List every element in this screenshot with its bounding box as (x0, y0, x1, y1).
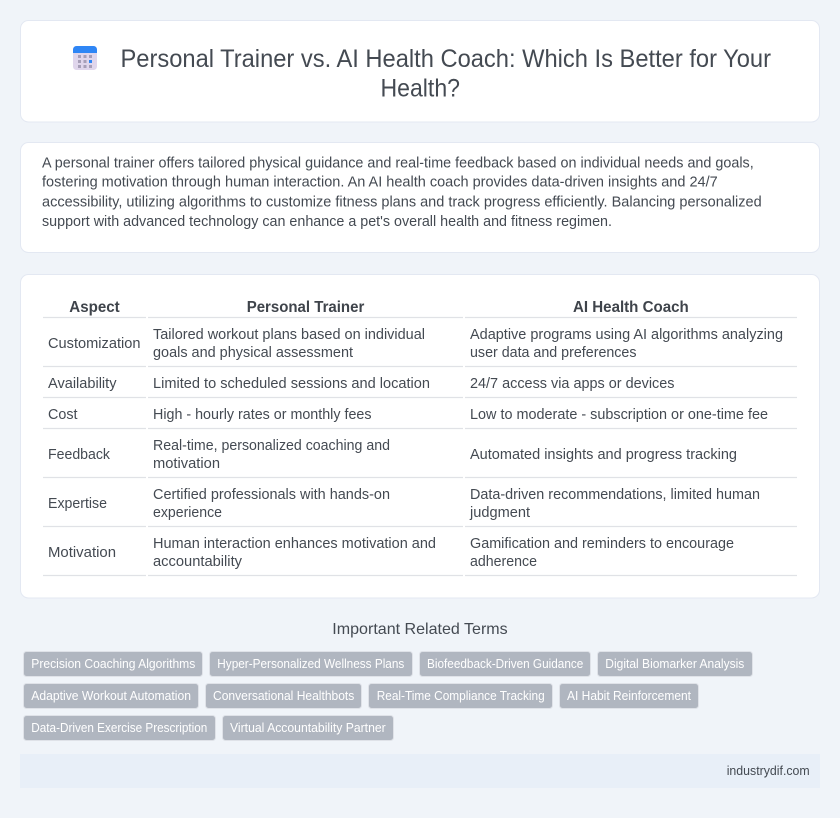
row: cost: Cost (48, 407, 78, 423)
row: availability: Availability (48, 376, 117, 392)
table header: Aspect (69, 299, 120, 316)
row: expertise (48, 487, 760, 521)
row: cost: High - hourly rates or monthly fees (153, 407, 372, 423)
row: motivation: Motivation (48, 545, 116, 561)
heading: important related terms: Important Related Terms (332, 621, 508, 638)
intro text: A personal trainer offers tailored physical guidance and real-time feedback based on individual needs and goals, (42, 156, 754, 172)
row: motivation: accountability (153, 554, 243, 570)
row: motivation: adherence (470, 554, 537, 570)
related term tags: Data-Driven Exercise Prescription (31, 721, 207, 735)
row: expertise: Expertise (48, 496, 107, 512)
intro text: accessibility, utilizing algorithms to customize fitness plans and track progress efficiently. Balancing personalized (42, 195, 762, 211)
row: expertise: experience (153, 505, 222, 521)
title: Health? (380, 74, 460, 102)
related term tags (24, 652, 752, 740)
table header (69, 299, 689, 316)
related term tags: Adaptive Workout Automation (31, 689, 191, 703)
row: feedback: Automated insights and progress tracking (470, 447, 737, 463)
row: availability: 24/7 access via apps or devices (470, 376, 674, 392)
row: feedback: Real-time, personalized coaching and (153, 438, 390, 454)
panel: comparison table (20, 274, 820, 598)
related term tags: Conversational Healthbots (213, 689, 354, 703)
intro text: support with advanced technology can enhance a pet's overall health and fitness regimen. (42, 214, 612, 230)
row: customization: Customization (48, 336, 140, 352)
intro text (42, 156, 762, 230)
related term tags: Real-Time Compliance Tracking (377, 689, 545, 703)
panel: introduction (20, 142, 820, 252)
row: expertise: judgment (469, 505, 530, 521)
row: feedback: motivation (153, 456, 220, 472)
row: motivation: Human interaction enhances motivation and (153, 536, 436, 552)
related term tags: Hyper-Personalized Wellness Plans (217, 657, 404, 671)
row: customization: goals and physical assessment (153, 345, 353, 361)
related term tags: Virtual Accountability Partner (230, 721, 386, 735)
row: cost (48, 407, 768, 423)
icon: calendar (73, 46, 97, 70)
panel: title header (20, 20, 820, 122)
row: expertise: Data-driven recommendations, limited human (470, 487, 760, 503)
title: Personal Trainer vs. AI Health Coach: Which Is Better for Your (120, 45, 771, 73)
row: motivation: Gamification and reminders to encourage (470, 536, 734, 552)
related term tags: Precision Coaching Algorithms (31, 657, 195, 671)
table grid lines (43, 318, 797, 576)
row: customization: Tailored workout plans based on individual (153, 327, 425, 343)
intro text: fostering motivation through human interaction. An AI health coach provides data-driven insights and 24/7 (42, 175, 718, 191)
related term tags: Digital Biomarker Analysis (605, 657, 744, 671)
title (120, 45, 771, 102)
row: feedback: Feedback (48, 447, 111, 463)
row: customization (48, 327, 783, 361)
row: feedback (48, 438, 737, 472)
footer (20, 754, 820, 788)
related term tags: Biofeedback-Driven Guidance (427, 657, 583, 671)
related term tags: AI Habit Reinforcement (567, 689, 691, 703)
footer: industrydif.com (727, 764, 810, 778)
row: cost: Low to moderate - subscription or one-time fee (470, 407, 768, 423)
row: customization: Adaptive programs using AI algorithms analyzing (470, 327, 783, 343)
row: expertise: Certified professionals with hands-on (153, 487, 390, 503)
row: availability (48, 376, 674, 392)
row: availability: Limited to scheduled sessions and location (153, 376, 430, 392)
row: motivation (48, 536, 734, 570)
row: customization: user data and preferences (470, 345, 636, 361)
table header: Personal Trainer (247, 299, 364, 316)
table header: AI Health Coach (573, 299, 689, 316)
